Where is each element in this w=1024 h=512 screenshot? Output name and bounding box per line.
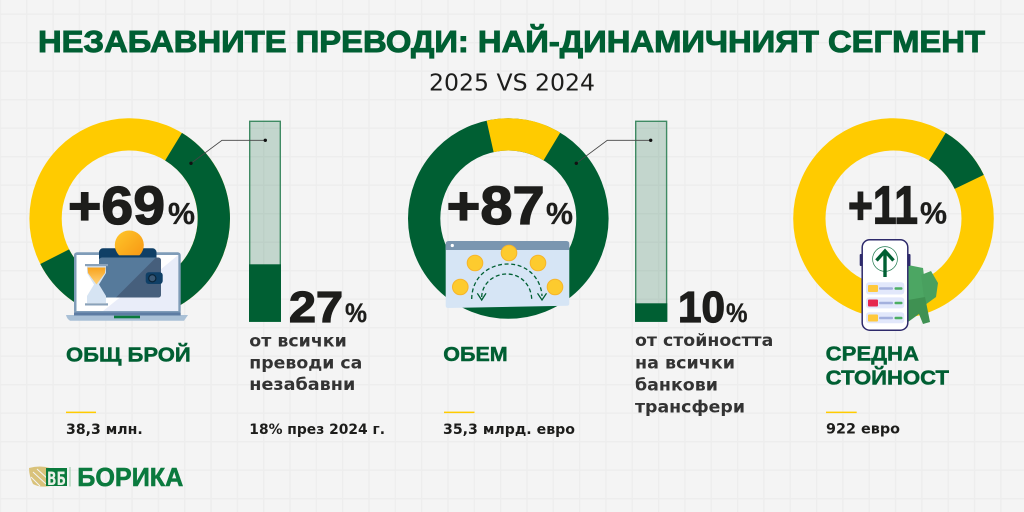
bar chart: share of instant transfers 27%: [249, 121, 281, 322]
icon: logo mark: [29, 466, 70, 490]
panel: total count: [46, 134, 214, 321]
logo: Borica: [29, 462, 184, 492]
value: average value: 922 евро: [826, 422, 900, 438]
text: share of value: от стойността: [635, 331, 773, 350]
note: 18% in 2024: 18% през 2024 г.: [249, 422, 385, 438]
subtitle: 2025 VS 2024: [429, 68, 595, 96]
value: total count: 38,3 млн.: [66, 422, 143, 438]
leader line: donut to bar: [189, 139, 267, 165]
text: share of value: трансфери: [635, 398, 745, 417]
text: share of instant transfers: незабавни: [249, 375, 355, 394]
text: share of instant transfers: [249, 332, 362, 394]
panel: volume: [424, 134, 592, 308]
stat: 27%: [289, 283, 367, 332]
value: average value: [826, 412, 900, 438]
text: share of value: на всички: [635, 353, 735, 372]
stat: 10%: 10: [678, 283, 725, 332]
text: share of value: [635, 331, 773, 417]
donut chart: average value: [809, 134, 978, 303]
stat: +87%: +87: [447, 176, 545, 236]
text: share of value: банкови: [635, 376, 718, 394]
icon: transfer window with coins: [446, 241, 569, 308]
stat: +69%: +69: [68, 176, 165, 236]
stat: 27%: 27: [289, 283, 343, 332]
stat: +87%: %: [546, 196, 573, 231]
stat: +69%: %: [168, 196, 195, 231]
icon: logo mark: ВБ: [47, 468, 66, 490]
stat: +11%: %: [920, 196, 947, 230]
value: volume: [443, 412, 575, 438]
value: total count: [66, 412, 143, 438]
heading: average value: СРЕДНА: [826, 343, 919, 366]
bar chart: share of value 10%: [635, 121, 667, 322]
heading: average value: СТОЙНОСТ: [826, 366, 950, 390]
stat: 27%: %: [345, 298, 367, 328]
icon: phone with money: [860, 240, 938, 330]
donut chart: total count: [46, 134, 214, 303]
panel: average value: [809, 134, 978, 330]
heading: average value: [826, 343, 950, 390]
text: share of instant transfers: преводи са: [249, 353, 362, 372]
text: share of instant transfers: от всички: [249, 332, 347, 350]
title: НЕЗАБАВНИТЕ ПРЕВОДИ: НАЙ-ДИНАМИЧНИЯТ СЕГМЕНТ: [38, 23, 985, 59]
donut chart: volume: [424, 134, 592, 303]
value: volume: 35,3 млрд. евро: [443, 422, 575, 438]
logo: Borica: БОРИКА: [77, 462, 184, 492]
heading: volume: ОБЕМ: [443, 343, 508, 366]
stat: 10%: %: [726, 298, 748, 328]
icon: laptop with wallet and hourglass: [66, 230, 188, 321]
heading: total count: ОБЩ БРОЙ: [66, 343, 191, 367]
leader line: donut to bar: [575, 139, 652, 165]
stat: +11%: +11: [848, 176, 918, 236]
